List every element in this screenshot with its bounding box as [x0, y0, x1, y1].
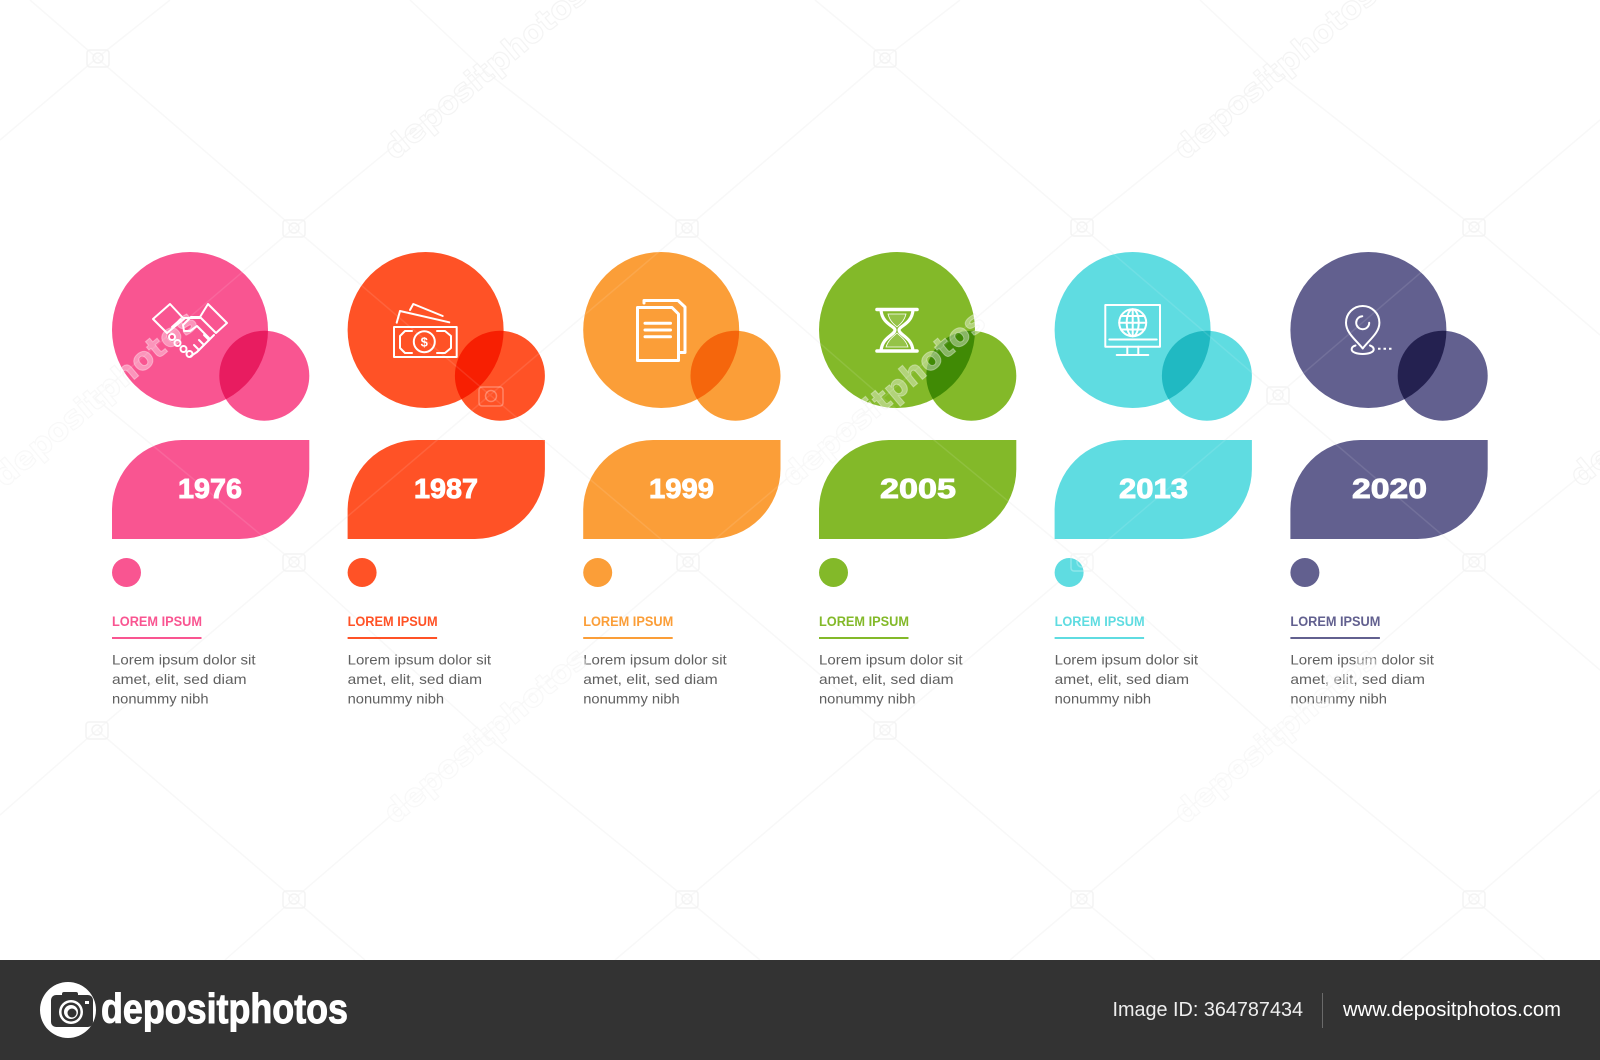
- year label: 2013: [1119, 473, 1188, 504]
- year tab: 2013: [1055, 440, 1252, 539]
- watermark pattern on background: depositphotos: [775, 303, 993, 494]
- icon: documents: [638, 300, 685, 360]
- year label: 1999: [649, 473, 714, 504]
- marker dot: [1055, 558, 1084, 587]
- description: amet, elit, sed diam: [583, 671, 718, 687]
- heading: LOREM IPSUM: [1290, 614, 1380, 629]
- watermark overlay on shapes: [0, 227, 1474, 831]
- panel: 2013: [1055, 252, 1252, 706]
- overlapping circles: 2005: [819, 252, 1016, 421]
- watermark overlay on shapes: depositphotos: [377, 640, 595, 831]
- overlapping circles: 2020: [1290, 252, 1488, 421]
- heading: LOREM IPSUM: [112, 614, 202, 629]
- heading: LOREM IPSUM: [348, 614, 438, 629]
- year label: 1987: [414, 473, 478, 504]
- panel: 1999: [583, 252, 780, 706]
- icon: hourglass: [877, 310, 917, 351]
- watermark pattern on background: depositphotos: [377, 640, 595, 831]
- year tab: 1987: [348, 440, 545, 539]
- icon: banknotes: $: [421, 334, 429, 350]
- heading: LOREM IPSUM: [583, 614, 673, 629]
- marker dot: [348, 558, 377, 587]
- year label: 2020: [1352, 473, 1427, 504]
- description: nonummy nibh: [112, 690, 208, 706]
- watermark pattern on background: depositphotos: [1167, 640, 1385, 831]
- panel: 1987: [348, 252, 545, 706]
- watermark overlay on shapes: depositphotos: [775, 303, 993, 494]
- marker dot: [112, 558, 141, 587]
- panel: 2005: [819, 252, 1016, 706]
- year tab: 2005: [819, 440, 1016, 539]
- description: nonummy nibh: [1055, 690, 1151, 706]
- heading: LOREM IPSUM: [1055, 614, 1145, 629]
- description: amet, elit, sed diam: [819, 671, 954, 687]
- icon: monitor with globe: [1105, 305, 1160, 355]
- year tab: 2020: [1290, 440, 1488, 539]
- overlapping circles: 1976: [112, 252, 309, 421]
- year label: 1976: [178, 473, 242, 504]
- footer bar: [0, 960, 1600, 1060]
- overlapping circles: 1999: [583, 252, 780, 421]
- marker dot: [583, 558, 612, 587]
- heading: LOREM IPSUM: [819, 614, 909, 629]
- description: amet, elit, sed diam: [112, 671, 246, 687]
- description: Lorem ipsum dolor sit: [1055, 652, 1198, 668]
- logo wordmark: depositphotos: [101, 985, 348, 1032]
- description: nonummy nibh: [348, 690, 444, 706]
- year tab: 1999: [583, 440, 780, 539]
- icon: camera logo: [40, 982, 96, 1038]
- overlapping circles: 1987: [348, 252, 545, 421]
- website url: www.depositphotos.com: [1342, 998, 1561, 1021]
- description: Lorem ipsum dolor sit: [112, 652, 256, 668]
- year tab: 1976: [112, 440, 309, 539]
- icon: location pin: [1346, 306, 1392, 354]
- description: amet, elit, sed diam: [1055, 671, 1189, 687]
- description: Lorem ipsum dolor sit: [583, 652, 727, 668]
- description: nonummy nibh: [583, 690, 680, 706]
- watermark overlay on shapes: depositphotos: [1167, 640, 1385, 831]
- description: nonummy nibh: [819, 690, 916, 706]
- description: Lorem ipsum dolor sit: [819, 652, 963, 668]
- icon: handshake: [153, 304, 227, 357]
- description: Lorem ipsum dolor sit: [1290, 652, 1434, 668]
- icon: banknotes: [394, 304, 457, 357]
- description: Lorem ipsum dolor sit: [348, 652, 491, 668]
- overlapping circles: 2013: [1055, 252, 1252, 421]
- marker dot: [819, 558, 848, 587]
- description: amet, elit, sed diam: [1290, 671, 1425, 687]
- panel: 2020: [1290, 252, 1488, 706]
- panel: 1976: [112, 252, 309, 706]
- description: nonummy nibh: [1290, 690, 1387, 706]
- description: amet, elit, sed diam: [348, 671, 482, 687]
- year label: 2005: [880, 473, 956, 504]
- marker dot: [1290, 558, 1319, 587]
- image id: Image ID: 364787434: [1112, 998, 1303, 1021]
